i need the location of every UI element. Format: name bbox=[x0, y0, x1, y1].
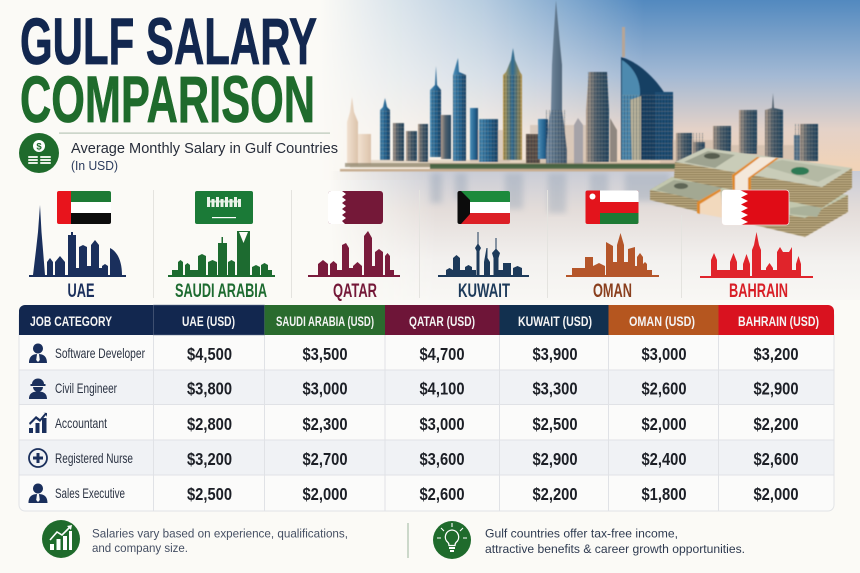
label: Oman: OMAN bbox=[593, 281, 632, 302]
unit note: (In USD) bbox=[71, 159, 118, 173]
table body background bbox=[19, 310, 834, 511]
label: Saudi Arabia: SAUDI ARABIA bbox=[175, 281, 267, 302]
row: Civil Engineer: $2,600 bbox=[642, 378, 687, 398]
header labels: JOB CATEGORY bbox=[30, 314, 112, 329]
row: Sales Executive bbox=[28, 484, 799, 504]
row: Registered Nurse: $2,900 bbox=[532, 449, 578, 469]
photo: water bbox=[347, 171, 860, 268]
row: Civil Engineer: $3,000 bbox=[302, 378, 348, 398]
header row: QATAR (USD) bbox=[409, 314, 475, 329]
row: Registered Nurse: $2,600 bbox=[754, 449, 799, 469]
icon: growth chart bbox=[42, 520, 80, 558]
title line 2: COMPARISON bbox=[20, 62, 315, 136]
skyline: UAE bbox=[29, 205, 126, 277]
row: Civil Engineer bbox=[29, 378, 799, 399]
flag: Qatar bbox=[328, 191, 383, 224]
panel: Bahrain bbox=[700, 190, 813, 302]
footer note: salaries: and company size. bbox=[92, 541, 188, 555]
label: Bahrain: BAHRAIN bbox=[729, 281, 788, 302]
photo: city skyline bbox=[340, 0, 818, 172]
label: Qatar: QATAR bbox=[333, 281, 377, 302]
icon: light bulb bbox=[433, 521, 471, 559]
header row: KUWAIT (USD) bbox=[518, 314, 592, 329]
row: Software Developer: $4,500 bbox=[187, 344, 232, 364]
flag: Bahrain bbox=[722, 190, 789, 225]
row: Software Developer: $3,000 bbox=[642, 344, 687, 364]
subtitle: Average Monthly Salary in Gulf Countries bbox=[71, 141, 338, 157]
row: Registered Nurse: $3,600 bbox=[420, 449, 465, 469]
row: Software Developer: Software Developer bbox=[55, 345, 145, 361]
header row: BAHRAIN (USD) bbox=[738, 314, 819, 329]
flag: UAE bbox=[57, 191, 111, 224]
row: Sales Executive: $2,200 bbox=[532, 484, 578, 504]
row: Civil Engineer: $4,100 bbox=[420, 378, 465, 398]
flag: Kuwait bbox=[458, 191, 510, 224]
row: Software Developer: $3,500 bbox=[302, 344, 348, 364]
row: Accountant: $2,300 bbox=[302, 414, 348, 434]
row: Sales Executive: $2,500 bbox=[187, 484, 232, 504]
row: Civil Engineer: $3,300 bbox=[532, 378, 578, 398]
footer note: salaries: Salaries vary based on experience, qualifications, bbox=[92, 526, 348, 540]
footer divider bbox=[408, 523, 409, 558]
row: Civil Engineer: $2,900 bbox=[754, 378, 799, 398]
row: Registered Nurse: $3,200 bbox=[187, 449, 232, 469]
row: Software Developer: $3,200 bbox=[754, 344, 799, 364]
panel: UAE bbox=[29, 191, 126, 302]
footer note: benefits: attractive benefits & career growth opportunities. bbox=[485, 542, 745, 556]
skyline: Bahrain bbox=[700, 232, 813, 278]
subtitle rule bbox=[59, 132, 330, 134]
label: UAE: UAE bbox=[68, 281, 94, 302]
panel: Qatar bbox=[308, 191, 400, 302]
country separators bbox=[154, 190, 682, 298]
row and column lines bbox=[19, 335, 834, 511]
row: Software Developer: $4,700 bbox=[420, 344, 465, 364]
skyline: Kuwait bbox=[438, 232, 529, 277]
header row: UAE (USD) bbox=[182, 314, 235, 329]
row: Accountant: Accountant bbox=[55, 415, 107, 431]
flag: Saudi Arabia bbox=[195, 191, 253, 224]
salary table bbox=[19, 305, 834, 511]
row: Registered Nurse: Registered Nurse bbox=[55, 450, 133, 466]
header row bbox=[19, 305, 834, 335]
row: Civil Engineer: Civil Engineer bbox=[55, 380, 117, 396]
skyline: Saudi Arabia bbox=[168, 231, 275, 277]
skyline: Oman bbox=[566, 233, 659, 277]
row: Sales Executive: Sales Executive bbox=[55, 485, 125, 501]
row: Accountant: $2,800 bbox=[187, 414, 232, 434]
row: Registered Nurse bbox=[29, 449, 799, 469]
title bbox=[20, 4, 317, 136]
header row: OMAN (USD) bbox=[629, 314, 695, 329]
row: Sales Executive: $2,000 bbox=[302, 484, 348, 504]
footer note: benefits bbox=[433, 521, 745, 559]
row: Registered Nurse: $2,700 bbox=[302, 449, 348, 469]
header row: SAUDI ARABIA (USD) bbox=[276, 314, 374, 329]
row: Registered Nurse: $2,400 bbox=[642, 449, 687, 469]
icon: coins and dollar bbox=[19, 133, 59, 173]
title line 1: GULF SALARY bbox=[20, 4, 317, 78]
panel: Saudi Arabia bbox=[168, 191, 275, 302]
icon: coins and dollar: $ bbox=[36, 142, 42, 152]
photo: sky bbox=[320, 0, 860, 180]
panel: Kuwait bbox=[438, 191, 529, 302]
row: Software Developer bbox=[29, 344, 799, 364]
row: Software Developer: $3,900 bbox=[532, 344, 578, 364]
photo: stacks of dollar bills bbox=[650, 148, 852, 237]
row: Accountant: $3,000 bbox=[420, 414, 465, 434]
row: Sales Executive: $1,800 bbox=[642, 484, 687, 504]
footer note: benefits: Gulf countries offer tax-free income, bbox=[485, 526, 678, 540]
row: Accountant: $2,500 bbox=[532, 414, 578, 434]
flag: Oman bbox=[586, 190, 638, 224]
row: Accountant: $2,000 bbox=[642, 414, 687, 434]
row: Civil Engineer: $3,800 bbox=[187, 378, 232, 398]
row: Sales Executive: $2,000 bbox=[754, 484, 799, 504]
label: Kuwait: KUWAIT bbox=[458, 281, 510, 302]
row: Accountant: $2,200 bbox=[754, 414, 799, 434]
kingdom tower opening bbox=[239, 232, 248, 243]
row: Sales Executive: $2,600 bbox=[420, 484, 465, 504]
alternating rows bbox=[20, 370, 834, 475]
footer note: salaries bbox=[42, 520, 348, 558]
panel: Oman bbox=[566, 190, 659, 302]
skyline: Qatar bbox=[308, 231, 400, 277]
row: Accountant bbox=[29, 412, 799, 434]
